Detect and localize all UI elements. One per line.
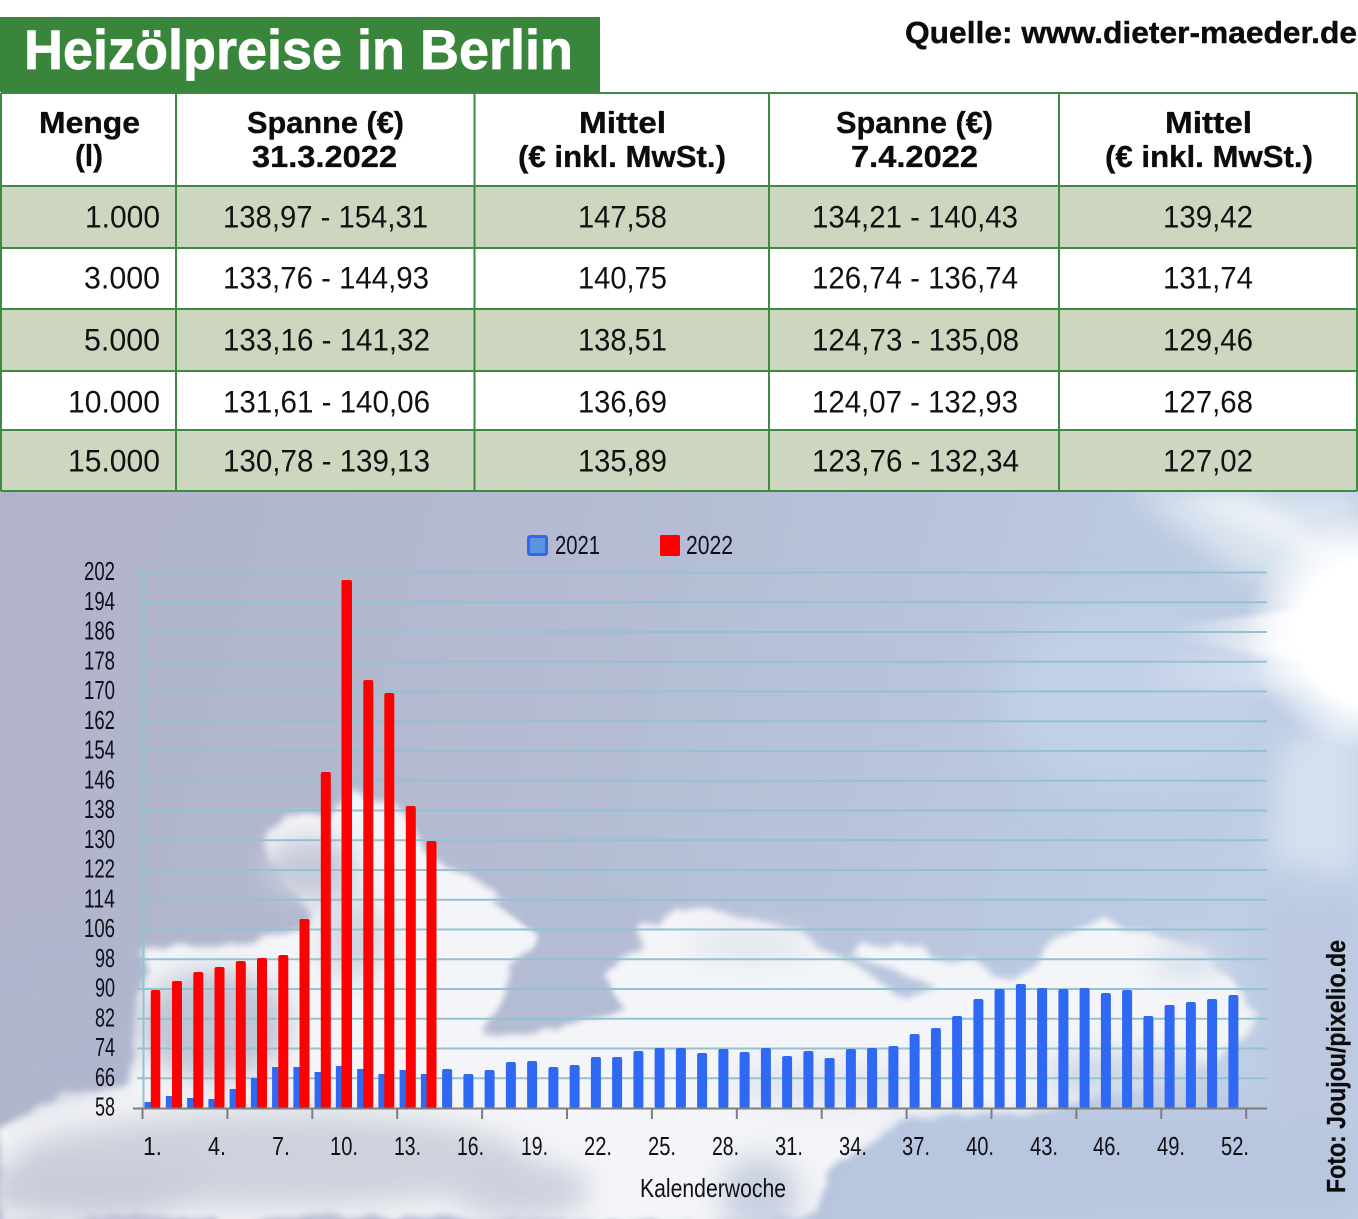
table header — [39, 105, 1313, 174]
row: 3.000 litres: 126,74 - 136,74 — [812, 260, 1018, 296]
row: 10.000 litres — [68, 384, 1253, 420]
y axis labels: 90 — [95, 973, 115, 1003]
y axis labels: 202 — [84, 556, 115, 586]
table header: Spanne (€) — [836, 105, 993, 140]
row: 15.000 litres: 123,76 - 132,34 — [812, 442, 1019, 478]
row: 10.000 litres: 131,61 - 140,06 — [223, 384, 430, 420]
price table — [1, 93, 1357, 491]
x axis title: Kalenderwoche — [640, 1173, 786, 1203]
row: 5.000 litres: 138,51 — [578, 322, 667, 358]
y axis labels: 98 — [95, 943, 115, 973]
y axis labels: 170 — [84, 675, 115, 705]
x axis labels: 13. — [394, 1131, 421, 1161]
y axis labels: 146 — [84, 764, 115, 794]
row: 15.000 litres: 127,02 — [1163, 442, 1253, 478]
y axis labels — [84, 556, 115, 1122]
x axis labels: 37. — [902, 1131, 930, 1161]
x axis labels: 28. — [712, 1131, 739, 1161]
y axis labels: 122 — [84, 854, 115, 884]
x axis labels: 10. — [330, 1131, 358, 1161]
x axis labels: 16. — [457, 1131, 484, 1161]
row: 5.000 litres: 124,73 - 135,08 — [812, 322, 1019, 358]
x axis labels: 4. — [208, 1131, 226, 1161]
source credit: Quelle: www.dieter-maeder.de — [905, 15, 1357, 50]
row: 5.000 litres — [84, 322, 1253, 358]
table header: (€ inkl. MwSt.) — [1105, 139, 1313, 174]
bars 2021 — [145, 984, 1238, 1108]
photo credit: Foto: Joujou/pixelio.de — [1323, 940, 1351, 1193]
row: 10.000 litres: 127,68 — [1163, 384, 1253, 420]
row: 3.000 litres — [84, 260, 1253, 296]
bars 2022 — [151, 580, 437, 1108]
table header: 31.3.2022 — [252, 139, 397, 174]
row: 5.000 litres: 129,46 — [1163, 322, 1253, 358]
row: 10.000 litres: 136,69 — [578, 384, 667, 420]
x axis labels — [143, 1131, 1249, 1161]
y axis labels: 58 — [95, 1092, 115, 1122]
x axis labels: 19. — [521, 1131, 548, 1161]
table header: Spanne (€) — [247, 105, 404, 140]
y axis labels: 178 — [84, 645, 115, 675]
legend: 2022 — [686, 530, 733, 560]
y axis labels: 74 — [95, 1032, 115, 1062]
x axis labels: 7. — [272, 1131, 290, 1161]
y axis labels: 162 — [84, 705, 115, 735]
row: 1.000 litres: 139,42 — [1163, 198, 1253, 234]
row: 3.000 litres: 131,74 — [1163, 260, 1253, 296]
table header: Mittel — [579, 105, 666, 140]
x axis labels: 1. — [143, 1131, 162, 1161]
y axis labels: 138 — [84, 794, 115, 824]
x axis labels: 22. — [584, 1131, 612, 1161]
x axis with tick marks — [133, 1108, 1267, 1119]
title banner: Heizölpreise in Berlin — [24, 18, 573, 81]
y axis labels: 106 — [84, 913, 115, 943]
y axis labels: 194 — [84, 586, 115, 616]
table row fills — [1, 93, 1357, 491]
y axis labels: 114 — [84, 883, 115, 913]
row: 15.000 litres: 135,89 — [578, 442, 667, 478]
row: 1.000 litres: 134,21 - 140,43 — [812, 198, 1018, 234]
x axis labels: 49. — [1157, 1131, 1185, 1161]
x axis labels: 40. — [966, 1131, 994, 1161]
row: 1.000 litres — [85, 198, 1253, 234]
table header: (€ inkl. MwSt.) — [518, 139, 726, 174]
row: 15.000 litres: 130,78 - 139,13 — [223, 442, 430, 478]
row: 1.000 litres: 147,58 — [578, 198, 667, 234]
row: 1.000 litres: 1.000 — [85, 198, 160, 234]
table header: Menge — [39, 105, 140, 140]
y axis labels: 130 — [84, 824, 115, 854]
row: 10.000 litres: 10.000 — [68, 384, 160, 420]
row: 5.000 litres: 133,16 - 141,32 — [223, 322, 430, 358]
row: 15.000 litres — [68, 442, 1253, 478]
y axis labels: 82 — [95, 1003, 115, 1033]
y axis labels: 66 — [95, 1062, 115, 1092]
x axis labels: 31. — [775, 1131, 803, 1161]
y axis labels: 154 — [84, 735, 115, 765]
row: 3.000 litres: 133,76 - 144,93 — [223, 260, 429, 296]
table header: (l) — [75, 138, 103, 173]
y axis labels: 186 — [84, 616, 115, 646]
bar chart: weekly prices 2021 vs 2022 — [84, 530, 1267, 1203]
row: 3.000 litres: 140,75 — [578, 260, 667, 296]
x axis labels: 52. — [1221, 1131, 1249, 1161]
legend: 2021 — [555, 530, 600, 560]
row: 15.000 litres: 15.000 — [68, 442, 160, 478]
background: sky photo with clouds and sun — [0, 491, 1358, 1219]
legend — [528, 530, 733, 560]
table header: Mittel — [1165, 105, 1252, 140]
row: 3.000 litres: 3.000 — [84, 260, 160, 296]
row: 5.000 litres: 5.000 — [84, 322, 160, 358]
row: 1.000 litres: 138,97 - 154,31 — [223, 198, 428, 234]
x axis labels: 34. — [839, 1131, 867, 1161]
x axis labels: 25. — [648, 1131, 676, 1161]
x axis labels: 43. — [1030, 1131, 1058, 1161]
table header: 7.4.2022 — [851, 139, 978, 174]
x axis labels: 46. — [1093, 1131, 1121, 1161]
row: 10.000 litres: 124,07 - 132,93 — [812, 384, 1018, 420]
